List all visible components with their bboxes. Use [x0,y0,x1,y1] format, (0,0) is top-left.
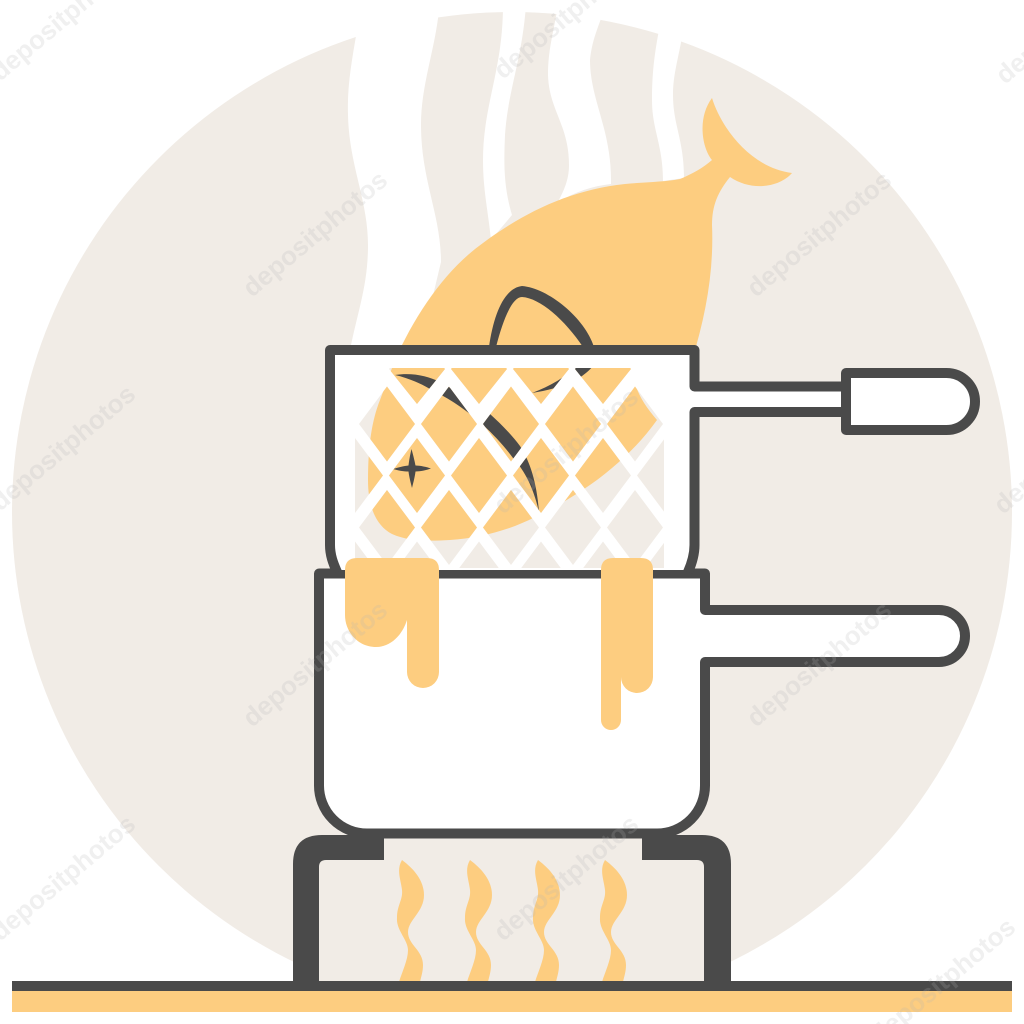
fish fin line [532,366,593,393]
drip: right [601,558,653,730]
steam [348,5,684,350]
pot body [319,574,965,834]
burner right leg [642,835,731,985]
fish head arc above basket [489,286,594,347]
basket handle rod [690,386,845,412]
flame 2 [465,860,492,982]
basket body [330,350,695,570]
watermark: depositphotos [237,594,393,733]
watermark: depositphotos [237,164,393,303]
fish upper body and tail [395,98,792,360]
basket outline [330,350,846,572]
flame 1 [397,860,424,982]
fish gill line [395,374,539,512]
flames [397,860,627,982]
basket handle grip [846,373,975,430]
watermark: depositphotos [488,381,644,520]
flame 3 [533,860,560,982]
watermark: depositphotos [741,594,897,733]
watermark: depositphotos [741,164,897,303]
ground line [12,981,1012,991]
frying basket [325,286,980,570]
fish eye [393,449,431,488]
burner stand [293,835,731,985]
ground band [12,991,1012,1012]
burner interior [319,839,704,982]
mesh contents [355,368,664,568]
watermark: depositphotos [488,808,644,947]
burner left leg [293,835,384,985]
drip: left [345,558,439,688]
flame 4 [600,860,627,982]
fish lower body [368,360,657,541]
